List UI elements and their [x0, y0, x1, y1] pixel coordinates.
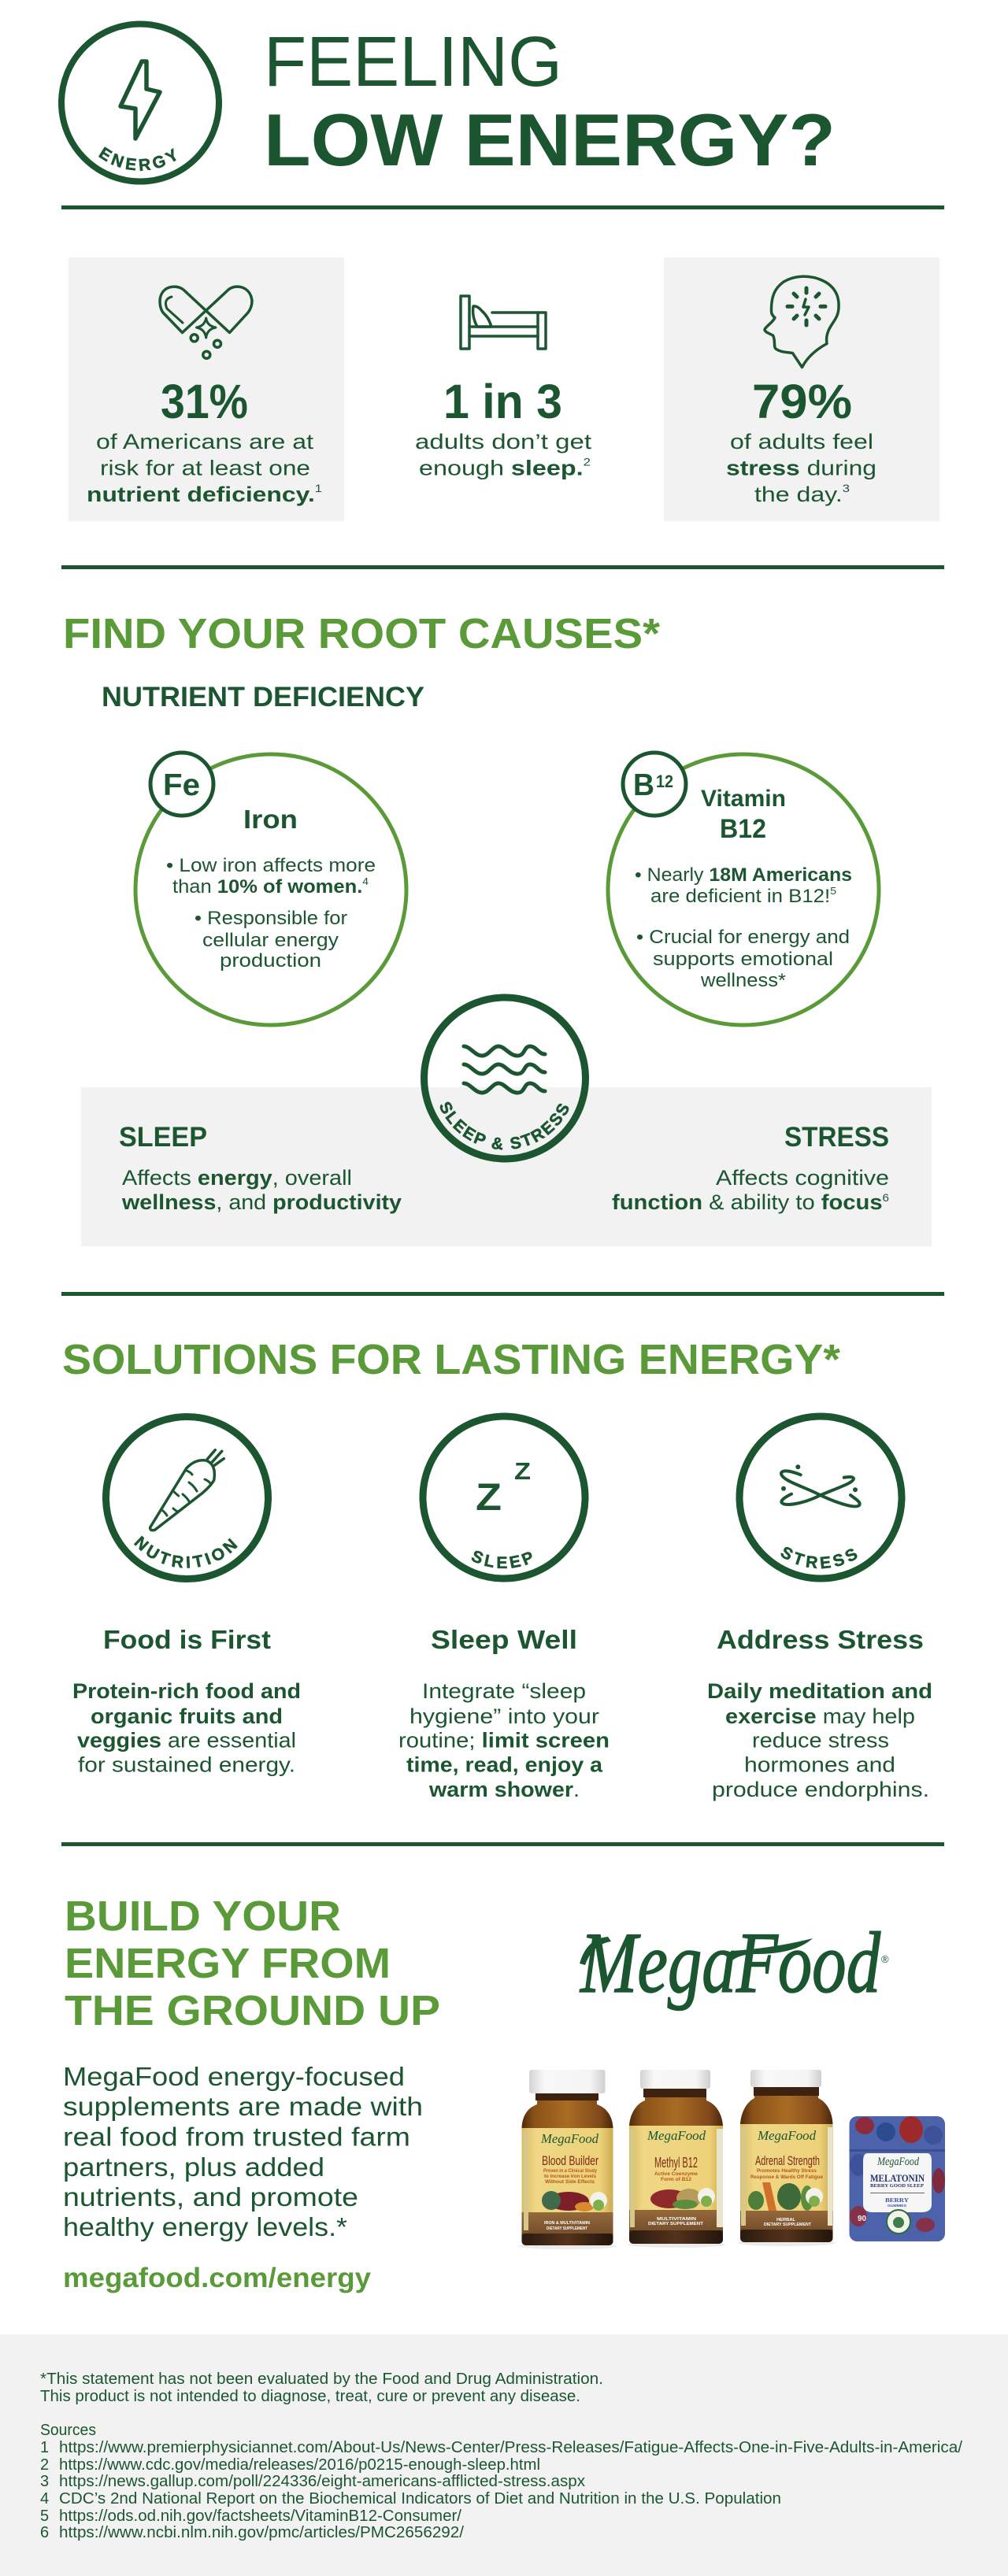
product: Melatonin gummies: 90 [858, 2215, 867, 2223]
sources list: 6 [40, 2524, 49, 2541]
stat text [726, 430, 876, 506]
disclaimer: This product is not intended to diagnose, treat, cure or prevent any disease. [40, 2388, 580, 2405]
disclaimer: *This statement has not been evaluated by the Food and Drug Administration. [40, 2371, 603, 2388]
product: Methyl B12 bottle: MULTIVITAMIN [657, 2217, 697, 2222]
icon: B12 badge: B [633, 768, 654, 802]
product: Adrenal Strength bottle: Response & Wards Off Fatigue [750, 2175, 824, 2180]
sources list: 3 [40, 2473, 49, 2490]
product: Blood Builder bottle [518, 2070, 616, 2249]
sources list: CDC’s 2nd National Report on the Biochemical Indicators of Diet and Nutrition in the U.S. Population [59, 2490, 781, 2508]
stress text [612, 1121, 889, 1214]
panel: nutrient deficiency stat [69, 257, 344, 521]
panel: sleep solution [398, 1412, 610, 1801]
icon: zz badge: SLEEP [471, 1551, 532, 1568]
text: sleep: routine; limit screen [398, 1729, 610, 1752]
text: sleep [398, 1679, 610, 1801]
product: Methyl B12 bottle: Form of B12 [661, 2178, 692, 2182]
b12 text: • Crucial for energy and [636, 927, 850, 948]
iron text [166, 855, 376, 972]
text: food: for sustained energy. [78, 1752, 295, 1776]
b12 text: 5 [830, 885, 836, 897]
heading: food is first: Food is First [103, 1625, 271, 1654]
product: Blood Builder bottle: DIETARY SUPPLEMENT [547, 2226, 587, 2231]
icon: capsule [160, 287, 252, 358]
stat text: nutrient deficiency. [87, 483, 315, 506]
stat text: risk for at least one [100, 457, 310, 480]
text: sleep: Integrate “sleep [422, 1679, 586, 1703]
heading: build your energy: BUILD YOUR [65, 1893, 341, 1940]
stat text: adults don’t get [415, 430, 592, 453]
icon: energy badge [58, 20, 222, 184]
heading: vitamin b12: B12 [720, 814, 766, 844]
product: Methyl B12 bottle [628, 2070, 725, 2248]
text: stress: hormones and [744, 1752, 895, 1776]
heading: vitamin b12 [701, 786, 786, 844]
b12 text: wellness* [700, 970, 786, 991]
product: Blood Builder bottle: Blood Builder [542, 2153, 598, 2168]
stat: 31%: 31% [161, 375, 248, 428]
product: Methyl B12 bottle: MegaFood [647, 2128, 706, 2143]
stat text: stress during [726, 457, 876, 480]
heading: iron: Iron [243, 805, 298, 834]
text: food [72, 1679, 301, 1776]
logo: MegaFood: MegaFood [579, 1915, 881, 2011]
product: Blood Builder bottle: MegaFood [540, 2131, 598, 2146]
iron text: than 10% of women. [172, 876, 354, 898]
heading: address stress: Address Stress [717, 1625, 924, 1654]
icon: zz badge [419, 1412, 589, 1582]
stat text: 3 [843, 482, 850, 494]
title: LOW ENERGY? [264, 98, 836, 181]
panel: nutrition [72, 1413, 301, 1776]
text: sleep: warm shower . [428, 1778, 580, 1801]
icon: zz badge: Z [476, 1477, 502, 1519]
b12 text [635, 864, 852, 991]
icon: sleep and stress badge [421, 994, 589, 1162]
stat: 79%: 79% [752, 375, 852, 428]
stress text: Affects cognitive [716, 1166, 889, 1190]
product: Blood Builder bottle: Proven in a Clinical Study [543, 2169, 598, 2174]
title: FEELING [264, 23, 562, 102]
product: Adrenal Strength bottle: DIETARY SUPPLEMENT [764, 2223, 811, 2227]
stat: 1 in 3: 1 in 3 [443, 375, 562, 428]
text: stress [707, 1679, 932, 1801]
text: product description: healthy energy levels.* [63, 2212, 347, 2241]
iron text: production [220, 950, 321, 972]
product: Blood Builder bottle: to Increase Iron Levels [544, 2174, 597, 2179]
heading: sleep well: Sleep Well [431, 1625, 577, 1654]
b12 text: • Nearly 18M Americans [635, 864, 852, 886]
stress text: function & ability to focus [612, 1190, 878, 1214]
heading: build your energy: THE GROUND UP [65, 1987, 440, 2034]
b12 text: are deficient in B12! [650, 886, 817, 907]
sources list: https://ods.od.nih.gov/factsheets/VitaminB12-Consumer/ [59, 2508, 461, 2525]
stat text: of adults feel [730, 430, 873, 453]
product: Methyl B12 bottle: DIETARY SUPPLEMENT [648, 2222, 703, 2226]
text: stress: reduce stress [752, 1729, 889, 1752]
product: Adrenal Strength bottle: MegaFood [757, 2128, 816, 2143]
sources list: 1 [40, 2439, 49, 2456]
stress text: 6 [883, 1191, 889, 1204]
text: product description: nutrients, and promote [63, 2182, 358, 2211]
product: Adrenal Strength bottle: HERBAL [776, 2218, 795, 2223]
panel: sleep and stress [81, 994, 932, 1246]
panel: stress solution [707, 1412, 932, 1801]
text: product description: MegaFood energy-focused [63, 2062, 405, 2091]
text: product description [63, 2062, 423, 2241]
sleep text [119, 1121, 402, 1214]
heading: build your energy: ENERGY FROM [65, 1940, 391, 1987]
panel: vitamin B12 [608, 753, 879, 1025]
icon: head with lightning [765, 276, 839, 367]
stat text: 1 [315, 482, 322, 494]
b12 text: supports emotional [653, 949, 833, 970]
stat text: 2 [584, 455, 591, 468]
icon: energy badge: ENERGY [98, 146, 176, 172]
text: product description: real food from trusted farm [63, 2123, 410, 2151]
stat text: enough sleep. [419, 457, 571, 480]
sources list: https://www.premierphysiciannet.com/About-Us/News-Center/Press-Releases/Fatigue-Affects-One-in-Five-Adults-in-America/ [59, 2439, 962, 2456]
text: product description: partners, plus added [63, 2152, 324, 2182]
product: Blood Builder bottle: IRON & MULTIVITAMIN [544, 2221, 590, 2226]
icon: bed [461, 296, 546, 349]
link: megafood.com/energy: megafood.com/energy [63, 2263, 372, 2293]
stat text: of Americans are at [96, 430, 314, 453]
panel: iron [135, 753, 406, 1025]
panel: sleep stat [415, 296, 592, 480]
text: product description: supplements are made with [63, 2092, 423, 2121]
icon: B12 badge: 12 [656, 772, 673, 791]
icon: stress badge [736, 1412, 906, 1582]
text: food: organic fruits and [91, 1704, 283, 1728]
stat text [415, 430, 592, 480]
product: Melatonin gummies: GUMMIES [888, 2204, 906, 2208]
disclaimer [40, 2371, 603, 2405]
heading: vitamin b12: Vitamin [701, 786, 786, 812]
text: stress: exercise may help [725, 1704, 915, 1728]
sleep text: Affects energy, overall [122, 1166, 352, 1190]
stress text: STRESS [784, 1121, 889, 1153]
sources list: https://news.gallup.com/poll/224336/eight-americans-afflicted-stress.aspx [59, 2473, 585, 2490]
panel: stress stat [664, 257, 939, 521]
icon: carrot badge: NUTRITION [134, 1535, 238, 1568]
stat text [87, 430, 322, 506]
iron text: • Responsible for [195, 908, 347, 929]
stat text: the day. [754, 483, 828, 506]
sources list: 5 [40, 2508, 49, 2525]
text: food: veggies are essential [77, 1729, 296, 1752]
logo: MegaFood: ® [881, 1953, 889, 1965]
text: stress: Daily meditation and [707, 1679, 932, 1703]
heading: solutions: SOLUTIONS FOR LASTING ENERGY* [62, 1336, 840, 1383]
product: Melatonin gummies: BERRY [885, 2197, 909, 2204]
product: Adrenal Strength bottle [738, 2070, 836, 2246]
icon: stress badge: STRESS [781, 1546, 858, 1569]
sources list: 2 [40, 2456, 49, 2474]
sleep text: wellness , and productivity [121, 1190, 402, 1214]
text: stress: produce endorphins. [712, 1778, 929, 1801]
icon: Fe badge [150, 753, 213, 816]
heading: build your energy [65, 1893, 440, 2034]
sources list: https://www.cdc.gov/media/releases/2016/p0215-enough-sleep.html [59, 2456, 540, 2474]
product: Adrenal Strength bottle: Promotes Healthy Stress [757, 2169, 817, 2174]
product: Melatonin gummies [849, 2116, 945, 2241]
icon: Fe badge: Fe [163, 768, 200, 802]
product: Adrenal Strength bottle: Adrenal Strength [755, 2153, 820, 2168]
sleep text: SLEEP [119, 1121, 207, 1153]
product: Methyl B12 bottle: Active Coenzyme [654, 2172, 699, 2177]
heading: nutrient deficiency: NUTRIENT DEFICIENCY [102, 681, 424, 712]
product: Melatonin gummies: MegaFood [876, 2156, 919, 2168]
sources list: 4 [40, 2490, 49, 2508]
title [264, 23, 836, 181]
text: sleep: hygiene” into your [410, 1704, 599, 1728]
iron text: 4 [362, 875, 369, 887]
icon: sleep and stress badge: SLEEP & STRESS [439, 1102, 569, 1149]
sources list: https://www.ncbi.nlm.nih.gov/pmc/articles/PMC2656292/ [59, 2524, 464, 2541]
heading: find your root causes: FIND YOUR ROOT CAUSES* [63, 610, 660, 657]
product: Melatonin gummies: MELATONIN [870, 2172, 925, 2184]
iron text: • Low iron affects more [166, 855, 376, 876]
sources list [40, 2422, 962, 2541]
text: sleep: time, read, enjoy a [406, 1752, 603, 1776]
icon: B12 badge [623, 753, 686, 816]
sources list: Sources [40, 2422, 96, 2439]
product: Blood Builder bottle: Without Side Effects [545, 2180, 595, 2185]
iron text: cellular energy [202, 930, 339, 951]
icon: zz badge: Z [514, 1457, 531, 1485]
text: food: Protein-rich food and [72, 1679, 301, 1703]
panel: footer [0, 2334, 1008, 2576]
product: Methyl B12 bottle: Methyl B12 [654, 2155, 698, 2171]
icon: carrot badge [102, 1413, 272, 1582]
product: Melatonin gummies: BERRY GOOD SLEEP [870, 2184, 924, 2189]
